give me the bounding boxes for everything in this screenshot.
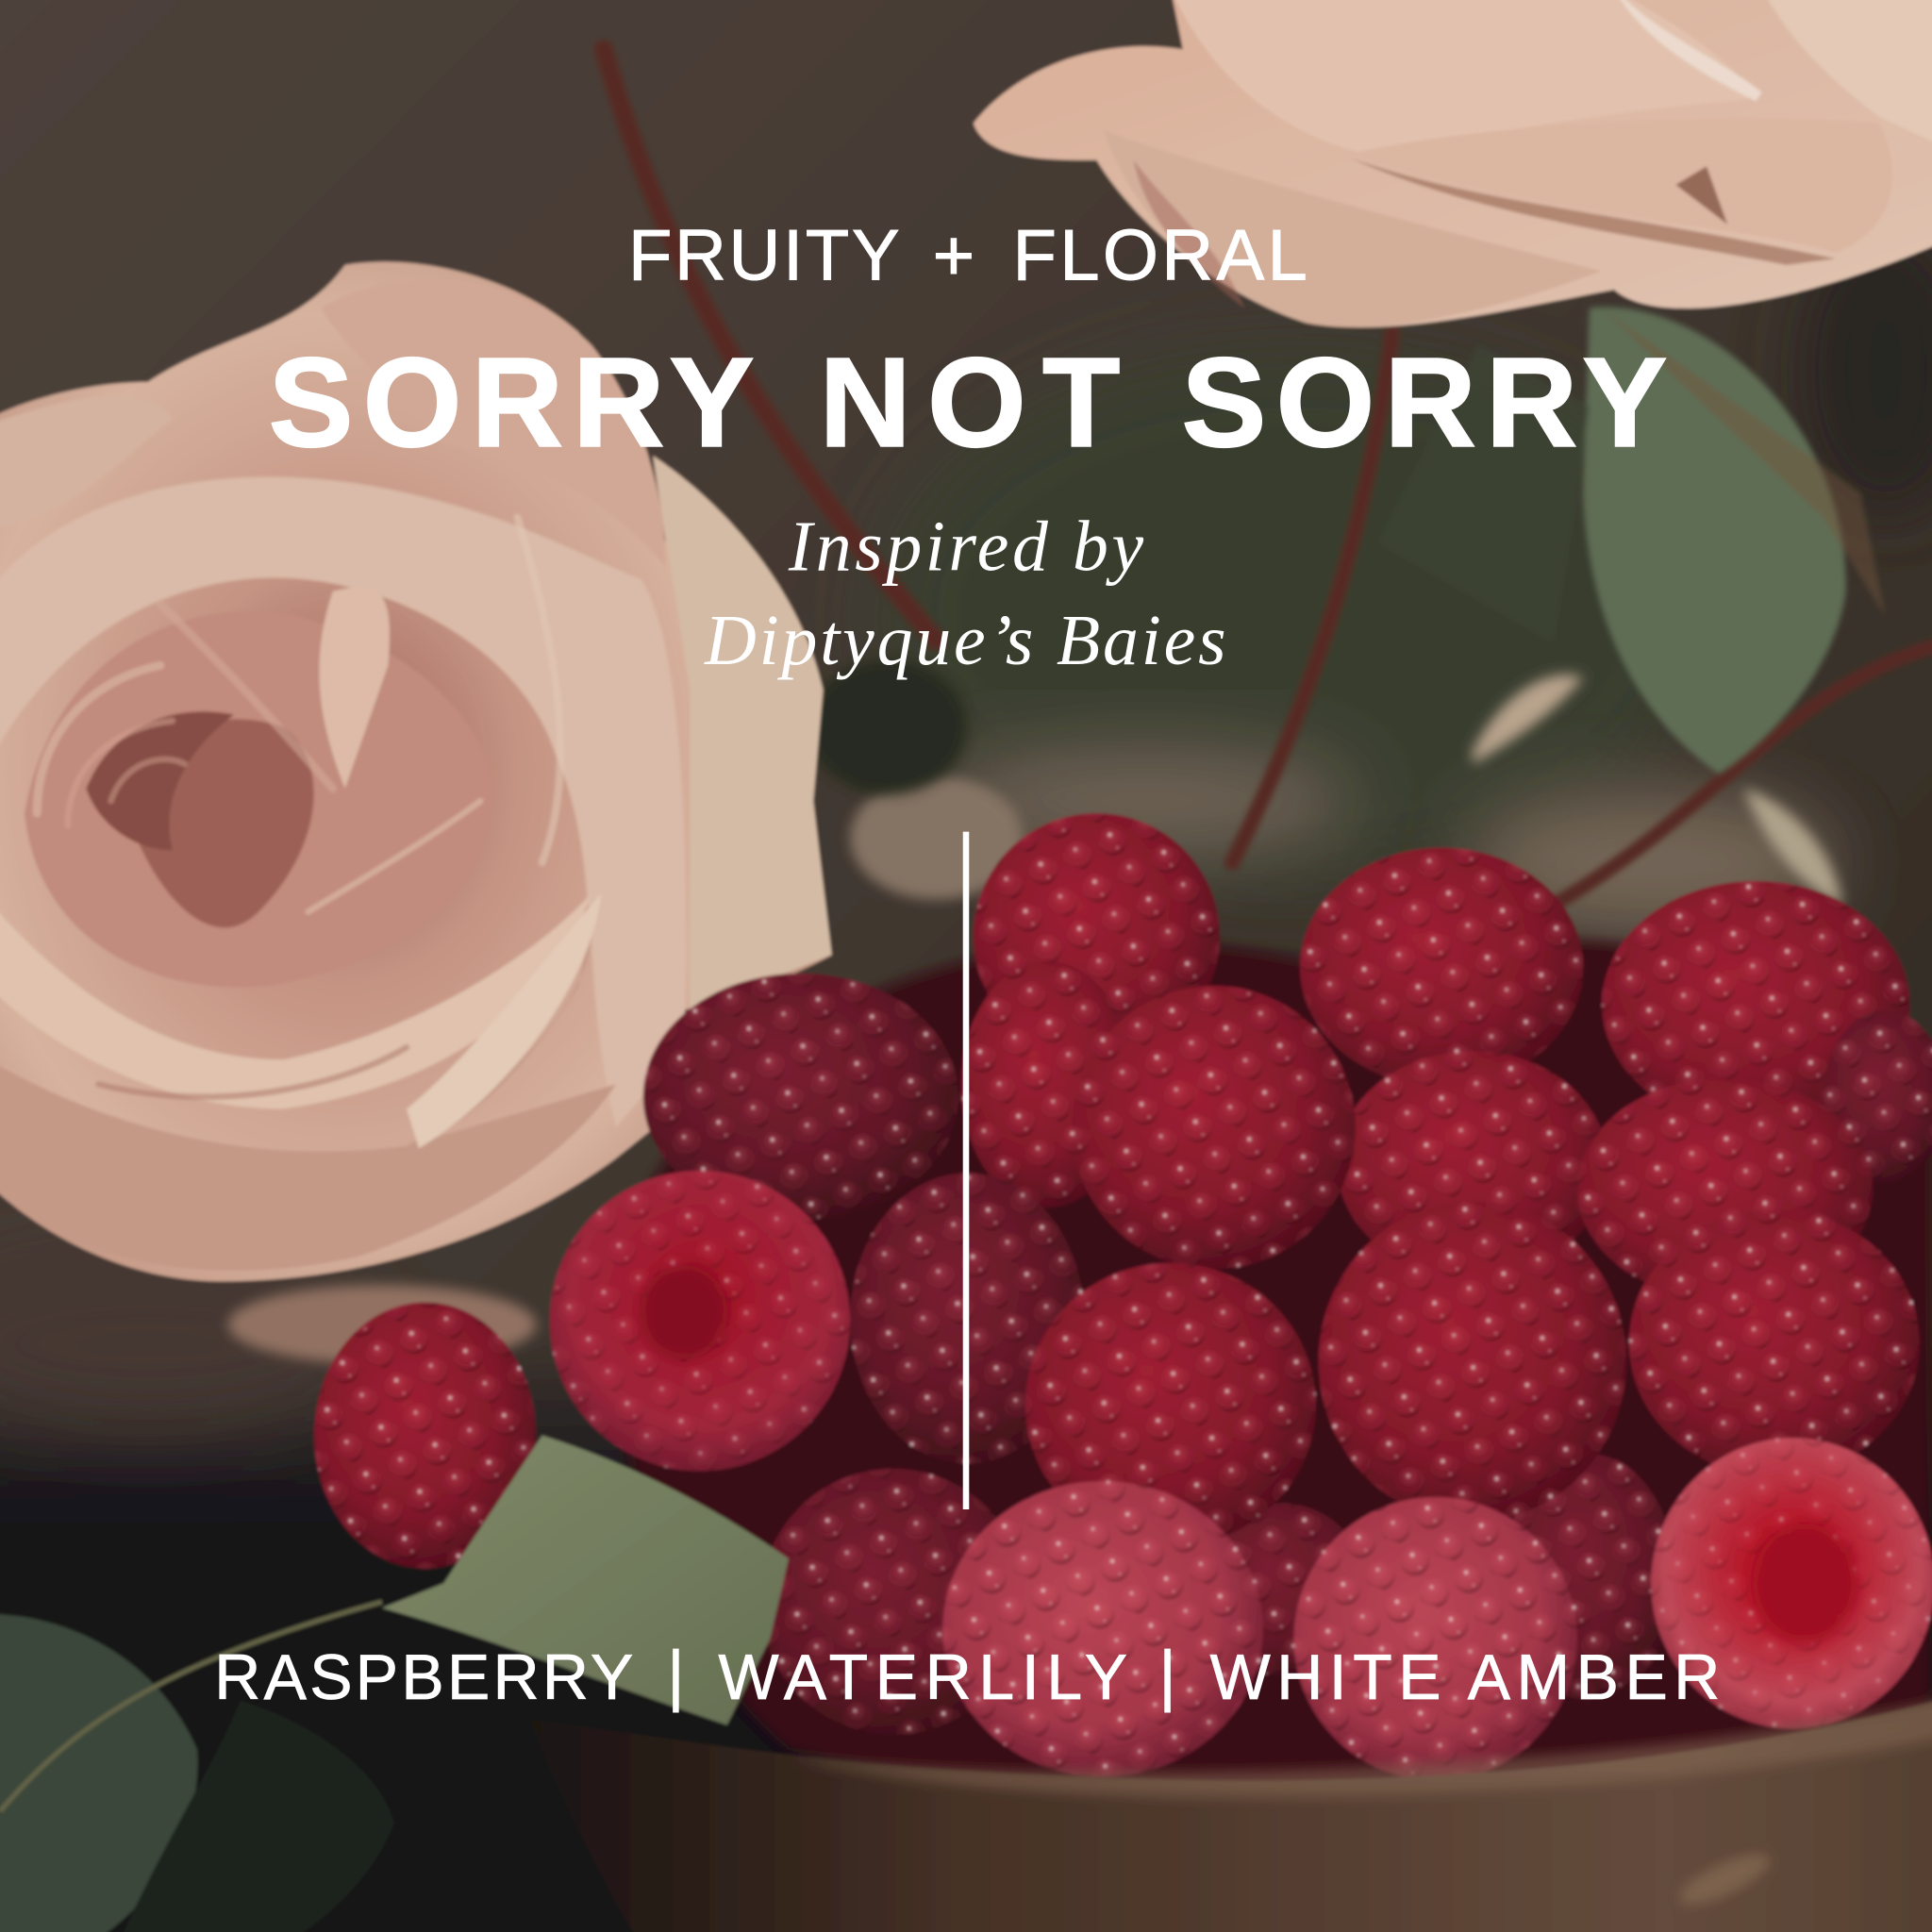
- leaf: upper right: [1380, 308, 1885, 774]
- raspberry: [1072, 986, 1356, 1269]
- leaf: green by raspberries: [382, 1436, 789, 1725]
- inspired by text: Diptyque’s Baies: [704, 601, 1226, 680]
- vertical divider line: [963, 832, 969, 1509]
- raspberry: [942, 1481, 1263, 1776]
- title: sorry not sorry: SORRY: [269, 331, 754, 474]
- raspberry: [1577, 1078, 1873, 1300]
- raspberry: [961, 961, 1134, 1208]
- bowl: [530, 1698, 1932, 1932]
- title: sorry not sorry: [269, 331, 1667, 474]
- raspberry: [974, 813, 1220, 1059]
- raspberry: [1824, 1010, 1932, 1183]
- petals below rose: [228, 1285, 536, 1364]
- raspberry: [1025, 1263, 1316, 1546]
- title: sorry not sorry: NOT: [820, 331, 1120, 474]
- rose: left large: [0, 262, 832, 1281]
- inspired by text: Inspired by: [788, 508, 1143, 587]
- raspberry: [1602, 881, 1909, 1127]
- pale petals in background: [850, 675, 1842, 906]
- inspired by text: [704, 508, 1226, 680]
- dark gaps behind raspberries: [623, 941, 1932, 1796]
- raspberry: [314, 1303, 536, 1569]
- rose: top right: [974, 0, 1932, 327]
- subtitle: fruity + floral: [628, 215, 1307, 295]
- raspberry: [1300, 848, 1583, 1087]
- raspberry: [1319, 1201, 1626, 1522]
- raspberry with hollow: [1651, 1438, 1932, 1728]
- scent notes: WHITE AMBER: [1210, 1642, 1720, 1713]
- raspberry: [1195, 1503, 1368, 1675]
- raspberry: [1337, 1051, 1607, 1277]
- raspberry: [1293, 1497, 1577, 1780]
- raspberry: [643, 974, 958, 1220]
- raspberry: [1503, 1454, 1675, 1700]
- scent notes: WATERLILY: [718, 1642, 1127, 1713]
- raspberry with hollow: [550, 1171, 850, 1472]
- scent notes: [214, 1642, 1720, 1713]
- subtitle: fruity + floral: FLORAL: [1013, 215, 1307, 295]
- raspberry: [850, 1173, 1084, 1464]
- raspberries: [314, 813, 1932, 1780]
- subtitle: fruity + floral: +: [933, 215, 974, 295]
- dark leaf behind rose: [808, 659, 967, 794]
- title: sorry not sorry: SORRY: [1182, 331, 1667, 474]
- raspberry: [1629, 1210, 1920, 1476]
- raspberry: [760, 1469, 1026, 1735]
- leaves: lower left: [0, 1602, 394, 1932]
- subtitle: fruity + floral: FRUITY: [628, 215, 899, 295]
- stems: [604, 49, 1932, 906]
- scent notes: RASPBERRY: [214, 1642, 633, 1713]
